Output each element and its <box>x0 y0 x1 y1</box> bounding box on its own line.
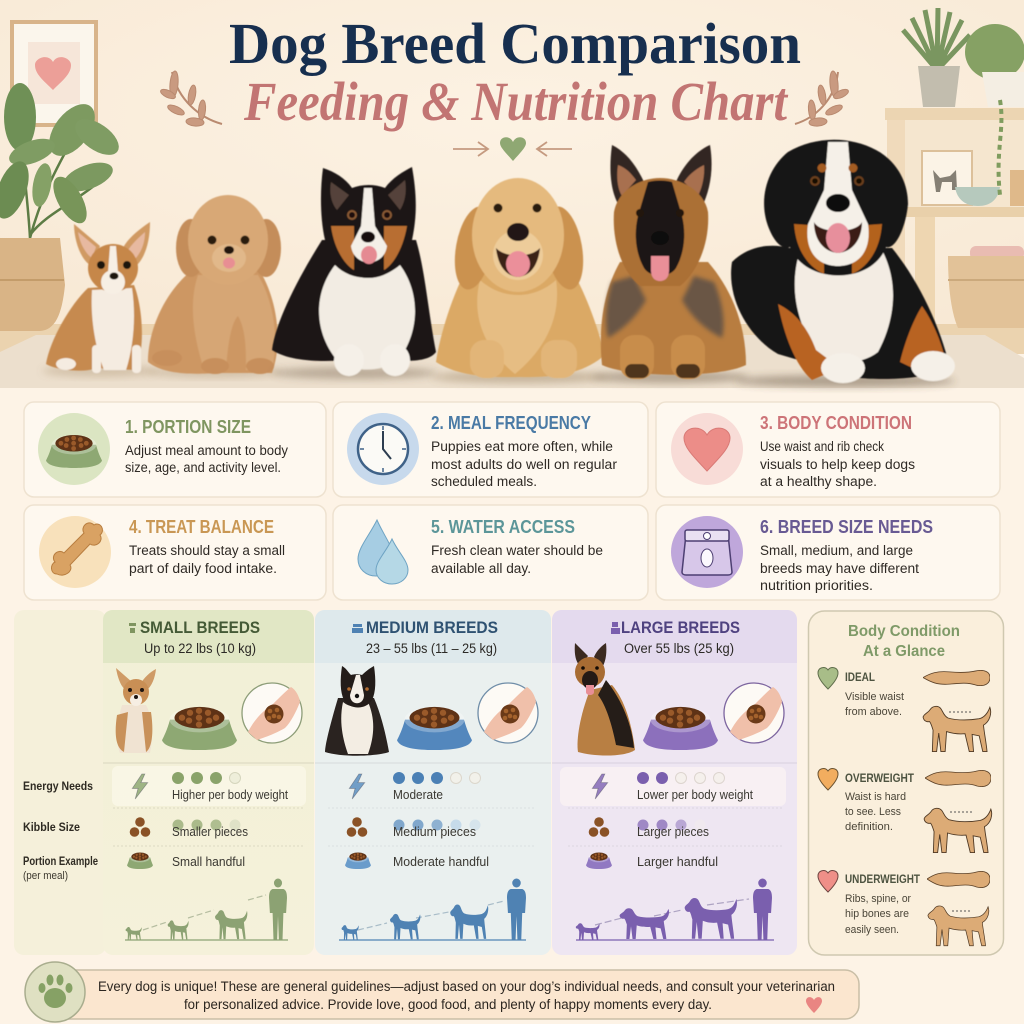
icon: food bowl <box>38 413 110 485</box>
underweight state: hip bones are <box>845 908 909 920</box>
laurel right <box>795 71 850 127</box>
icon: paw badge <box>25 962 85 1022</box>
portion row <box>586 852 718 869</box>
divider <box>328 808 536 846</box>
card 3: body condition <box>656 402 1000 497</box>
icon: water drops <box>358 520 408 584</box>
body text: Use waist and rib check <box>760 439 884 454</box>
heading: portion size: 1. PORTION SIZE <box>125 417 251 437</box>
row label: kibble size: Kibble Size <box>23 820 80 834</box>
weight range: 23 – 55 lbs (11 – 25 kg) <box>366 641 497 656</box>
overweight state <box>818 769 992 853</box>
divider <box>315 762 551 764</box>
divider <box>113 808 303 846</box>
body text: Small, medium, and large <box>760 543 913 558</box>
dog: golden retriever <box>432 178 608 383</box>
energy row <box>560 767 786 806</box>
portion row <box>345 852 489 869</box>
rug <box>0 335 1024 388</box>
body text: available all day. <box>431 561 531 576</box>
kibble row <box>589 817 709 839</box>
paw mini icon <box>129 623 136 633</box>
body text: size, age, and activity level. <box>125 460 281 475</box>
title <box>229 11 801 132</box>
header: large breeds: LARGE BREEDS <box>621 618 740 637</box>
portion row: Moderate handful <box>393 855 489 869</box>
bowl <box>643 707 718 750</box>
icon: scale <box>671 516 743 588</box>
energy row <box>349 772 480 802</box>
divider <box>552 762 797 764</box>
row label: portion example: Portion Example <box>23 854 98 868</box>
body text: nutrition priorities. <box>760 578 873 593</box>
row label note: per meal: (per meal) <box>23 870 68 882</box>
handful circle <box>724 683 784 743</box>
panel heading: Body Condition <box>848 623 960 640</box>
kibble row <box>347 817 480 839</box>
left potted plant <box>0 83 125 331</box>
mini dog: german shepherd <box>575 643 635 756</box>
footer text: Every dog is unique! These are general guidelines—adjust based on your dog’s individual needs, and consult your veterinarian <box>98 979 835 994</box>
body text: Puppies eat more often, while <box>431 439 613 454</box>
mini dog: collie <box>325 666 389 756</box>
energy row <box>112 766 306 806</box>
body text: Adjust meal amount to body <box>125 443 288 458</box>
wall art with heart <box>12 22 96 125</box>
hero scene: room with six dogs <box>0 0 1024 388</box>
divider <box>568 808 784 846</box>
dog: chihuahua <box>42 222 158 377</box>
energy row: Lower per body weight <box>637 788 753 802</box>
portion row: Small handful <box>172 855 245 869</box>
row label: energy needs: Energy Needs <box>23 779 93 793</box>
paw mini icon <box>611 622 620 634</box>
overweight state: to see. Less <box>845 806 901 818</box>
footer text: for personalized advice. Provide love, good food, and plenty of happy moments every day. <box>184 997 712 1012</box>
ideal state: from above. <box>845 706 902 718</box>
size silhouettes <box>125 878 288 940</box>
dog: poodle <box>147 195 283 378</box>
icon: clock <box>347 413 419 485</box>
kibble row: Medium pieces <box>393 825 476 839</box>
underweight state: Ribs, spine, or <box>845 893 911 905</box>
body text: scheduled meals. <box>431 474 537 489</box>
bowl <box>162 707 237 750</box>
overweight state: definition. <box>845 821 893 833</box>
body text: at a healthy shape. <box>760 474 877 489</box>
handful circle <box>242 683 302 743</box>
card 6: breed size needs <box>656 505 1000 600</box>
icon: small heart <box>806 997 822 1013</box>
heading: breed size needs: 6. BREED SIZE NEEDS <box>760 517 933 537</box>
heading: treat balance: 4. TREAT BALANCE <box>129 517 274 537</box>
panel heading: At a Glance <box>863 643 945 660</box>
kibble row <box>130 817 248 839</box>
wall <box>0 0 1024 330</box>
laurel left <box>159 71 222 127</box>
column: medium breeds <box>315 610 551 955</box>
header: medium breeds: MEDIUM BREEDS <box>366 618 498 637</box>
ideal state <box>818 668 991 752</box>
bowl <box>397 707 472 750</box>
card 1: portion size <box>24 402 326 497</box>
icon: bone treat <box>39 516 111 588</box>
dog: german shepherd <box>592 145 748 383</box>
heading: body condition: 3. BODY CONDITION <box>760 413 912 433</box>
portion row <box>127 852 245 869</box>
kibble row: Smaller pieces <box>172 825 248 839</box>
column: small breeds <box>103 610 314 955</box>
header: small breeds: SMALL BREEDS <box>140 618 260 637</box>
overweight state: OVERWEIGHT <box>845 771 915 785</box>
body text: breeds may have different <box>760 561 919 576</box>
mini dog: chihuahua <box>116 668 156 753</box>
kibble row: Larger pieces <box>637 825 709 839</box>
weight range: Over 55 lbs (25 kg) <box>624 641 734 656</box>
size silhouettes <box>339 878 526 940</box>
divider <box>103 762 314 764</box>
overweight state: Waist is hard <box>845 791 906 803</box>
ideal state: IDEAL <box>845 670 875 684</box>
handful circle <box>478 683 538 743</box>
footer note <box>25 962 859 1022</box>
size silhouettes <box>576 878 774 940</box>
paw mini icon <box>352 624 363 633</box>
title line: dog breed comparison: Dog Breed Comparison <box>229 11 801 76</box>
column: large breeds <box>552 610 797 955</box>
body text: Treats should stay a small <box>129 543 285 558</box>
heading: meal frequency: 2. MEAL FREQUENCY <box>431 413 591 433</box>
energy row: Moderate <box>393 788 443 802</box>
underweight state: UNDERWEIGHT <box>845 872 921 886</box>
comparison table: row labels column <box>14 610 106 955</box>
wood floor <box>0 324 1024 354</box>
portion row: Larger handful <box>637 855 718 869</box>
body text: Fresh clean water should be <box>431 543 603 558</box>
icon: heart <box>671 413 743 485</box>
panel: body condition at a glance <box>808 611 1004 955</box>
underweight state <box>818 871 990 946</box>
energy row: Higher per body weight <box>172 788 288 802</box>
card 5: water access <box>333 505 648 600</box>
ideal state: Visible waist <box>845 691 904 703</box>
dog: bernese mountain dog <box>731 140 955 387</box>
subtitle: feeding and nutrition chart: Feeding & Nutrition Chart <box>243 71 789 132</box>
card 2: meal frequency <box>333 402 648 497</box>
body text: visuals to help keep dogs <box>760 457 915 472</box>
right shelf with plants, frame and basket <box>885 8 1024 328</box>
body text: most adults do well on regular <box>431 457 618 472</box>
heading: water access: 5. WATER ACCESS <box>431 517 575 537</box>
dog: collie <box>272 167 437 379</box>
underweight state: easily seen. <box>845 924 899 936</box>
decorative green heart with arrows <box>453 137 572 161</box>
card 4: treat balance <box>24 505 326 600</box>
weight range: Up to 22 lbs (10 kg) <box>144 641 256 656</box>
body text: part of daily food intake. <box>129 561 277 576</box>
